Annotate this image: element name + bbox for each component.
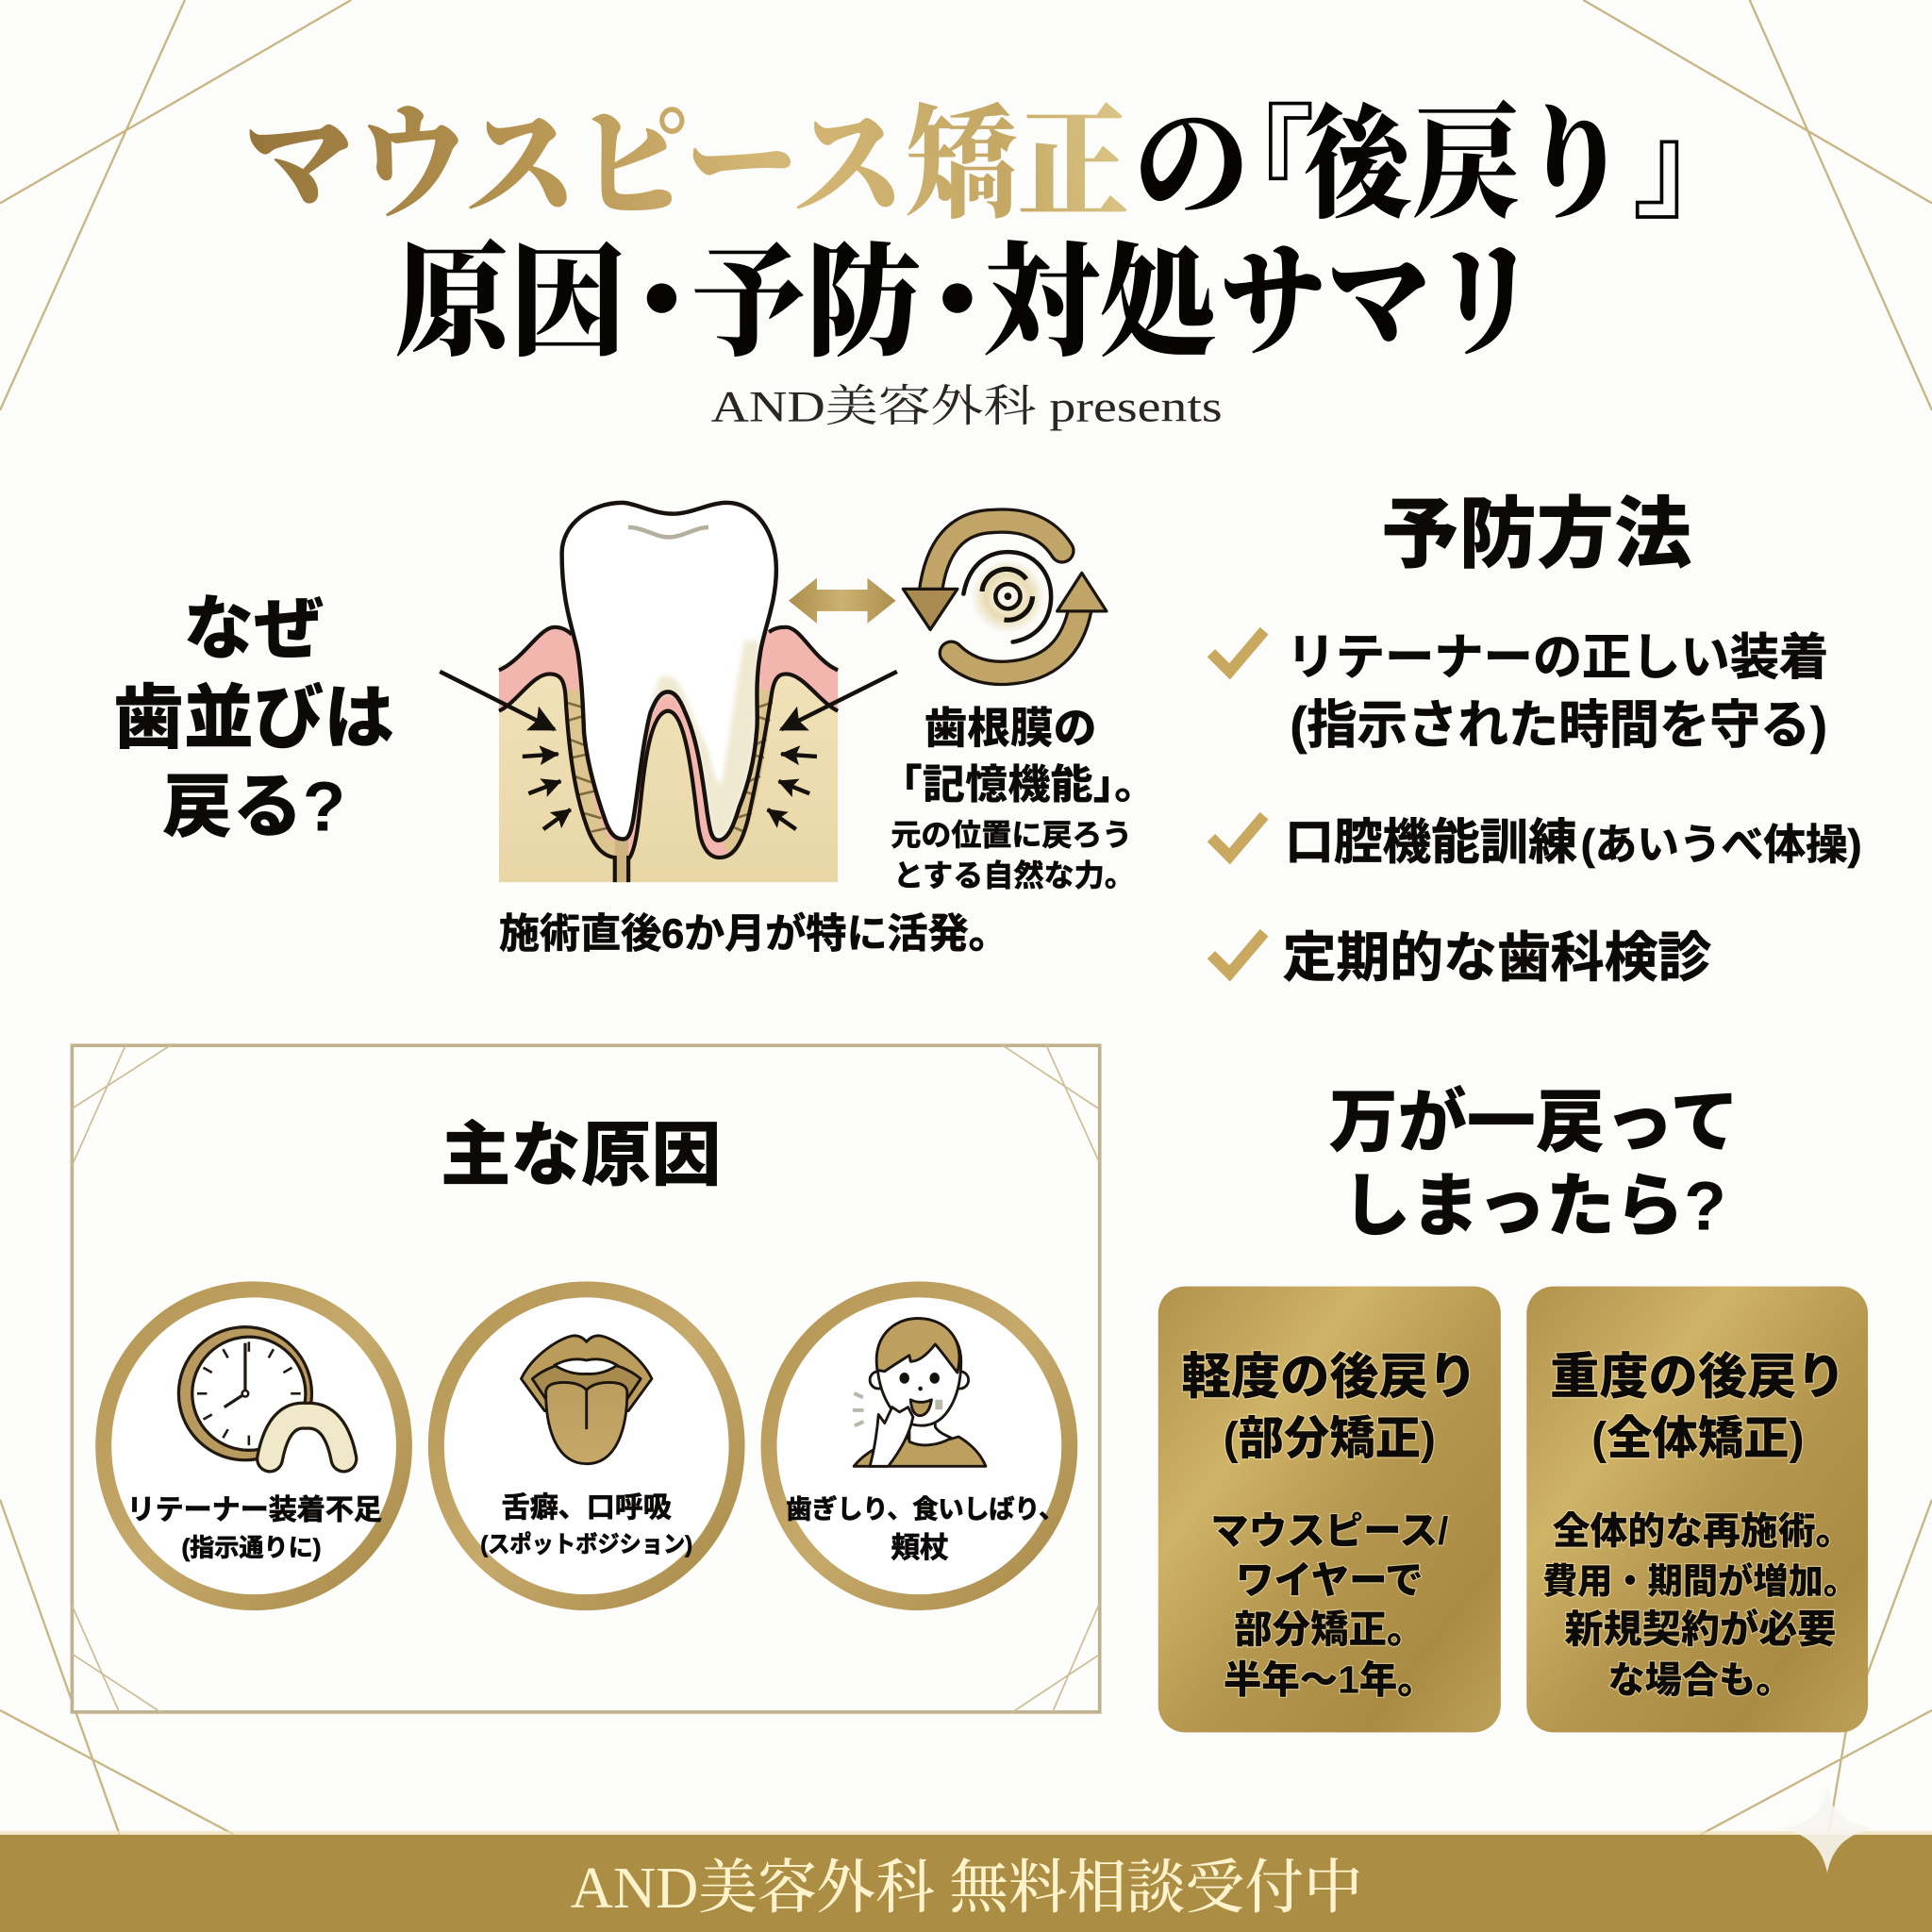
title line 2: サマリ xyxy=(1220,237,1538,373)
title line 2 xyxy=(394,237,1538,373)
text: periodontal ligament memory: とする自然な力。 xyxy=(893,858,1135,892)
icon: sparkle watermark xyxy=(1782,1787,1873,1873)
card: severe relapse: な場合も。 xyxy=(1608,1661,1792,1702)
item: retainer xyxy=(1287,630,1828,755)
circle: retainer shortage xyxy=(104,1290,404,1603)
title line 2: 原因 xyxy=(394,237,626,373)
label: 頬杖 xyxy=(891,1531,949,1564)
footer text: AND美容外科 無料相談受付中 xyxy=(571,1855,1363,1921)
label xyxy=(127,1494,382,1562)
title line 1 black part: 』 xyxy=(1633,98,1756,234)
label xyxy=(480,1492,692,1558)
card: mild relapse: (部分矯正) xyxy=(1224,1413,1436,1464)
check icons xyxy=(1211,631,1264,974)
panel: main causes xyxy=(72,1045,1100,1713)
heading: prevention methods: 予防方法 xyxy=(1381,491,1691,577)
illustration: tooth cross-section xyxy=(499,503,838,882)
heading: why does alignment return: 歯並びは xyxy=(113,678,394,757)
card: mild relapse: 半年〜1年。 xyxy=(1224,1658,1436,1702)
text: periodontal ligament memory: 歯根膜の xyxy=(924,705,1096,753)
subtitle: AND美容外科 presents xyxy=(711,383,1223,432)
card: severe relapse: (全体矯正) xyxy=(1591,1413,1805,1464)
icon: person touching jaw xyxy=(854,1319,986,1466)
card: severe relapse: 全体的な再施術。 xyxy=(1553,1511,1853,1553)
title xyxy=(242,98,1756,373)
title line 1 black part: 後戻り xyxy=(1304,98,1629,234)
item: oral function training xyxy=(1285,814,1862,869)
item: retainer: リテーナーの正しい装着 xyxy=(1287,630,1828,685)
face details xyxy=(853,1373,942,1427)
item: retainer: (指示された時間を守る) xyxy=(1291,696,1827,755)
item: oral function training: (あいうべ体操) xyxy=(1581,822,1862,868)
panel: prevention xyxy=(1211,491,1862,988)
text: most active six months: 施術直後6か月が特に活発。 xyxy=(499,911,1009,957)
heading: in case it returns: 万が一戻って xyxy=(1329,1085,1740,1161)
text: periodontal ligament memory xyxy=(880,705,1157,892)
circle: grinding and clenching xyxy=(769,1290,1070,1603)
circle: tongue habit and mouth breathing xyxy=(436,1290,737,1603)
force arrows pressing on the root xyxy=(440,672,897,829)
title line 1 black part: 『 xyxy=(1191,98,1315,234)
arrow: gold double-headed xyxy=(789,578,896,624)
title line 1 black part: の xyxy=(1134,98,1249,234)
title line 2: ・ xyxy=(896,237,1019,373)
card: mild relapse: 部分矯正。 xyxy=(1234,1607,1424,1651)
footer band xyxy=(0,1831,1932,1932)
label xyxy=(786,1494,1064,1564)
card: mild relapse xyxy=(1158,1287,1501,1732)
card: mild relapse: マウスピース/ xyxy=(1210,1509,1448,1553)
icon: clock and retainer xyxy=(178,1327,362,1474)
label: リテーナー装着不足 xyxy=(127,1494,382,1525)
heading: why does alignment return: 戻る? xyxy=(162,767,345,845)
text: periodontal ligament memory: 「記憶機能」。 xyxy=(880,762,1157,808)
title line 2: ・ xyxy=(600,237,724,373)
heading: why does alignment return xyxy=(113,590,394,845)
icon: circular memory arrows xyxy=(903,521,1107,673)
title line 1 black part xyxy=(1134,98,1756,234)
icon: mouth and tongue xyxy=(521,1336,652,1464)
item: regular dental checkup: 定期的な歯科検診 xyxy=(1283,928,1711,988)
label: 歯ぎしり、食いしばり、 xyxy=(786,1494,1064,1524)
card: severe relapse xyxy=(1526,1287,1868,1732)
title line 2: 対処 xyxy=(983,237,1216,373)
text: periodontal ligament memory: 元の位置に戻ろう xyxy=(891,818,1132,852)
card: mild relapse: 軽度の後戻り xyxy=(1182,1350,1477,1405)
title line 1 gold part: マウスピース矯正 xyxy=(242,98,1130,234)
label: (スポットボジション) xyxy=(480,1532,692,1558)
card: mild relapse: ワイヤーで xyxy=(1236,1558,1424,1602)
frame corner lines xyxy=(72,1045,1099,1713)
heading: in case it returns xyxy=(1329,1085,1740,1245)
label: 舌癖、口呼吸 xyxy=(502,1492,672,1524)
heading: in case it returns: しまったら? xyxy=(1341,1169,1726,1245)
item: oral function training: 口腔機能訓練 xyxy=(1285,814,1577,869)
label: (指示通りに) xyxy=(181,1534,321,1562)
card: severe relapse: 重度の後戻り xyxy=(1550,1350,1846,1405)
heading: why does alignment return: なぜ xyxy=(184,590,325,668)
title line 2: 予防 xyxy=(691,237,921,373)
card: severe relapse: 費用・期間が増加。 xyxy=(1542,1561,1858,1601)
heading: main causes: 主な原因 xyxy=(441,1116,722,1194)
card: severe relapse: 新規契約が必要 xyxy=(1565,1607,1836,1651)
